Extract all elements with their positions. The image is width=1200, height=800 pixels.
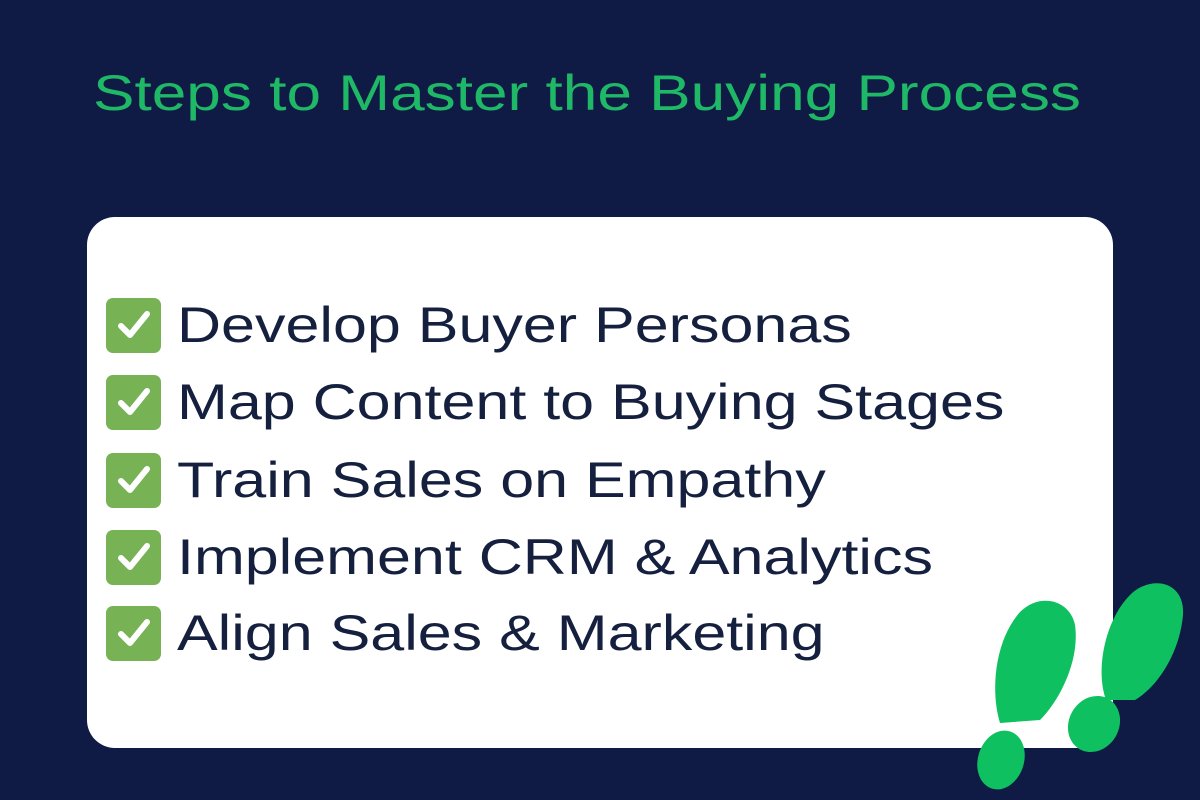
step 3: Train Sales on Empathy: [177, 452, 826, 508]
panel: steps card: [87, 217, 1113, 748]
step 5: Align Sales & Marketing: [177, 605, 825, 661]
title: Steps to Master the Buying Process: [93, 65, 1081, 121]
step 4: Implement CRM & Analytics: [177, 529, 933, 585]
step 1: Develop Buyer Personas: [177, 297, 852, 353]
step 2: Map Content to Buying Stages: [177, 374, 1004, 430]
